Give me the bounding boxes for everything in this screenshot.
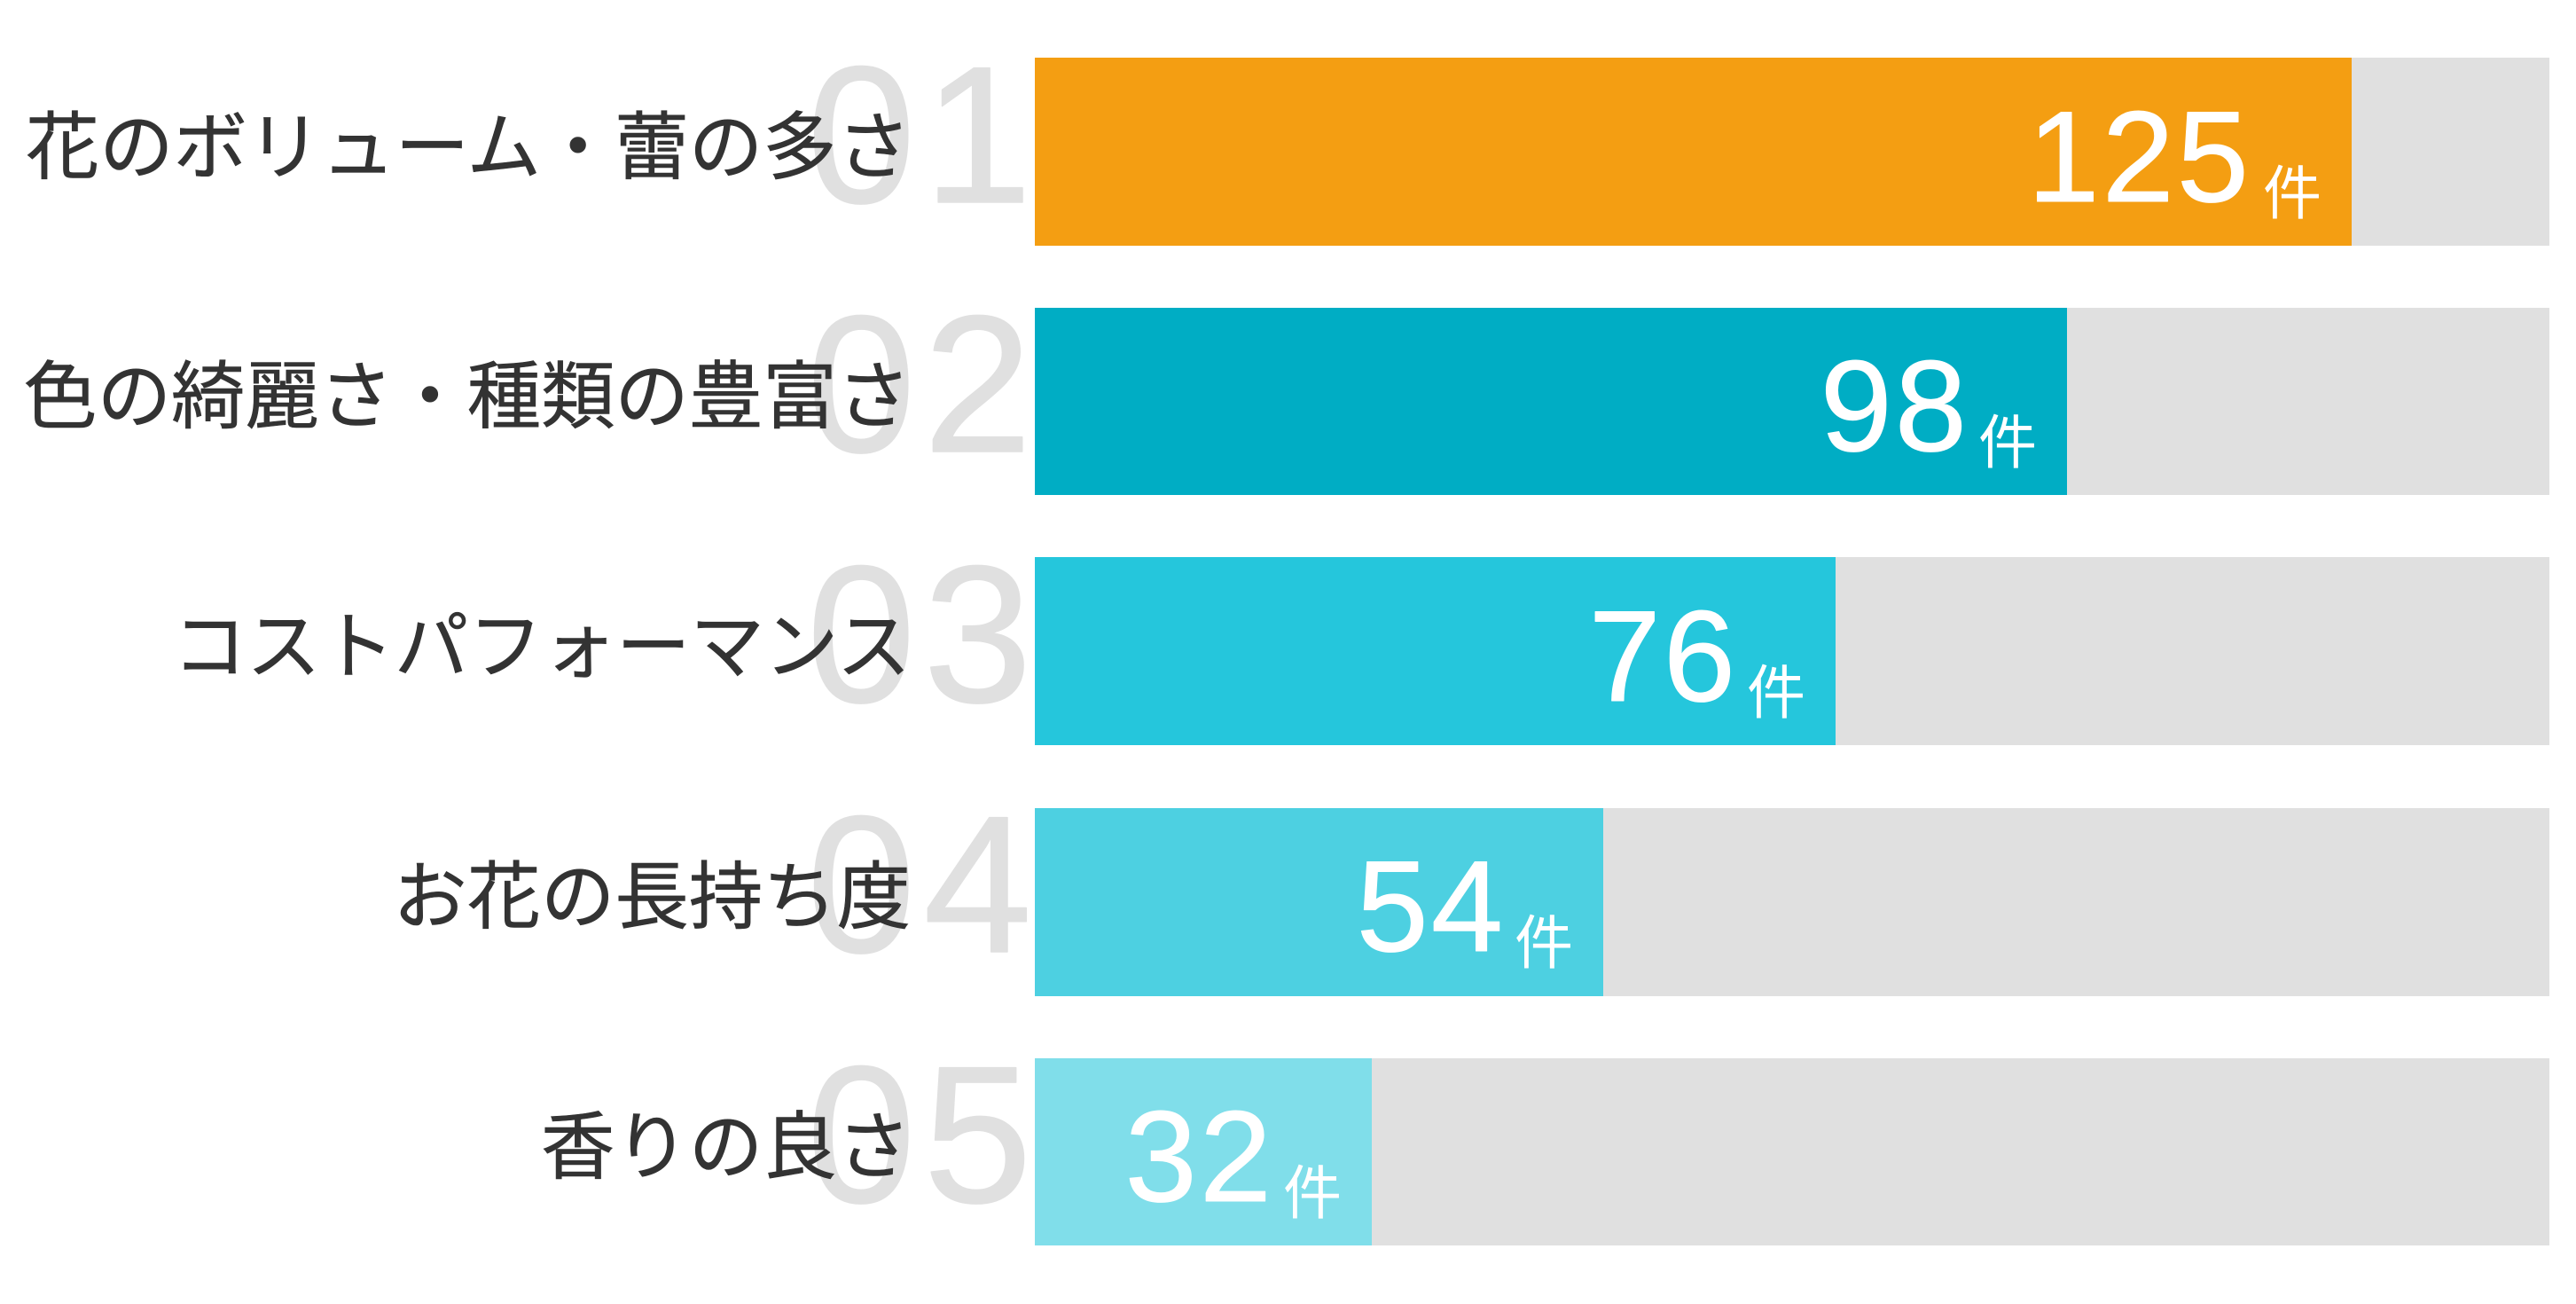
track bar 2	[1035, 308, 2549, 495]
unit 1: 件	[2263, 161, 2322, 226]
row 4: longevity	[393, 775, 2549, 996]
unit 4: 件	[1515, 910, 1573, 976]
value bar 3	[1035, 557, 1836, 745]
value bar 1	[1035, 58, 2352, 246]
value 98: 98	[1820, 334, 1969, 478]
track bar 5	[1035, 1058, 2549, 1245]
track bar 3	[1035, 557, 2549, 745]
rank number 05: 05	[807, 1025, 1040, 1244]
unit 3: 件	[1747, 660, 1805, 726]
value 125: 125	[2027, 84, 2251, 229]
value 32: 32	[1125, 1084, 1274, 1229]
value bar 4	[1035, 808, 1603, 996]
value bar 5	[1035, 1058, 1372, 1245]
rank number 03: 03	[807, 525, 1040, 743]
value bar 2	[1035, 308, 2067, 495]
rank number 04: 04	[807, 775, 1040, 994]
row 1: flower volume	[26, 26, 2549, 246]
label 2: 色の綺麗さ・種類の豊富さ	[23, 356, 911, 438]
label 5: 香りの良さ	[541, 1106, 911, 1189]
label 1: 花のボリューム・蕾の多さ	[26, 106, 911, 189]
rank number 02: 02	[807, 275, 1040, 493]
label 3: コストパフォーマンス	[173, 606, 911, 688]
row 5: fragrance	[541, 1025, 2549, 1245]
unit 5: 件	[1283, 1160, 1342, 1226]
track bar 4	[1035, 808, 2549, 996]
rank number 01: 01	[807, 26, 1040, 244]
value 76: 76	[1589, 584, 1738, 728]
row 3: cost performance	[173, 525, 2549, 745]
unit 2: 件	[1978, 410, 2037, 475]
row 2: color beauty	[23, 275, 2549, 495]
label 4: お花の長持ち度	[393, 856, 911, 939]
track bar 1	[1035, 58, 2549, 246]
value 54: 54	[1357, 834, 1506, 978]
